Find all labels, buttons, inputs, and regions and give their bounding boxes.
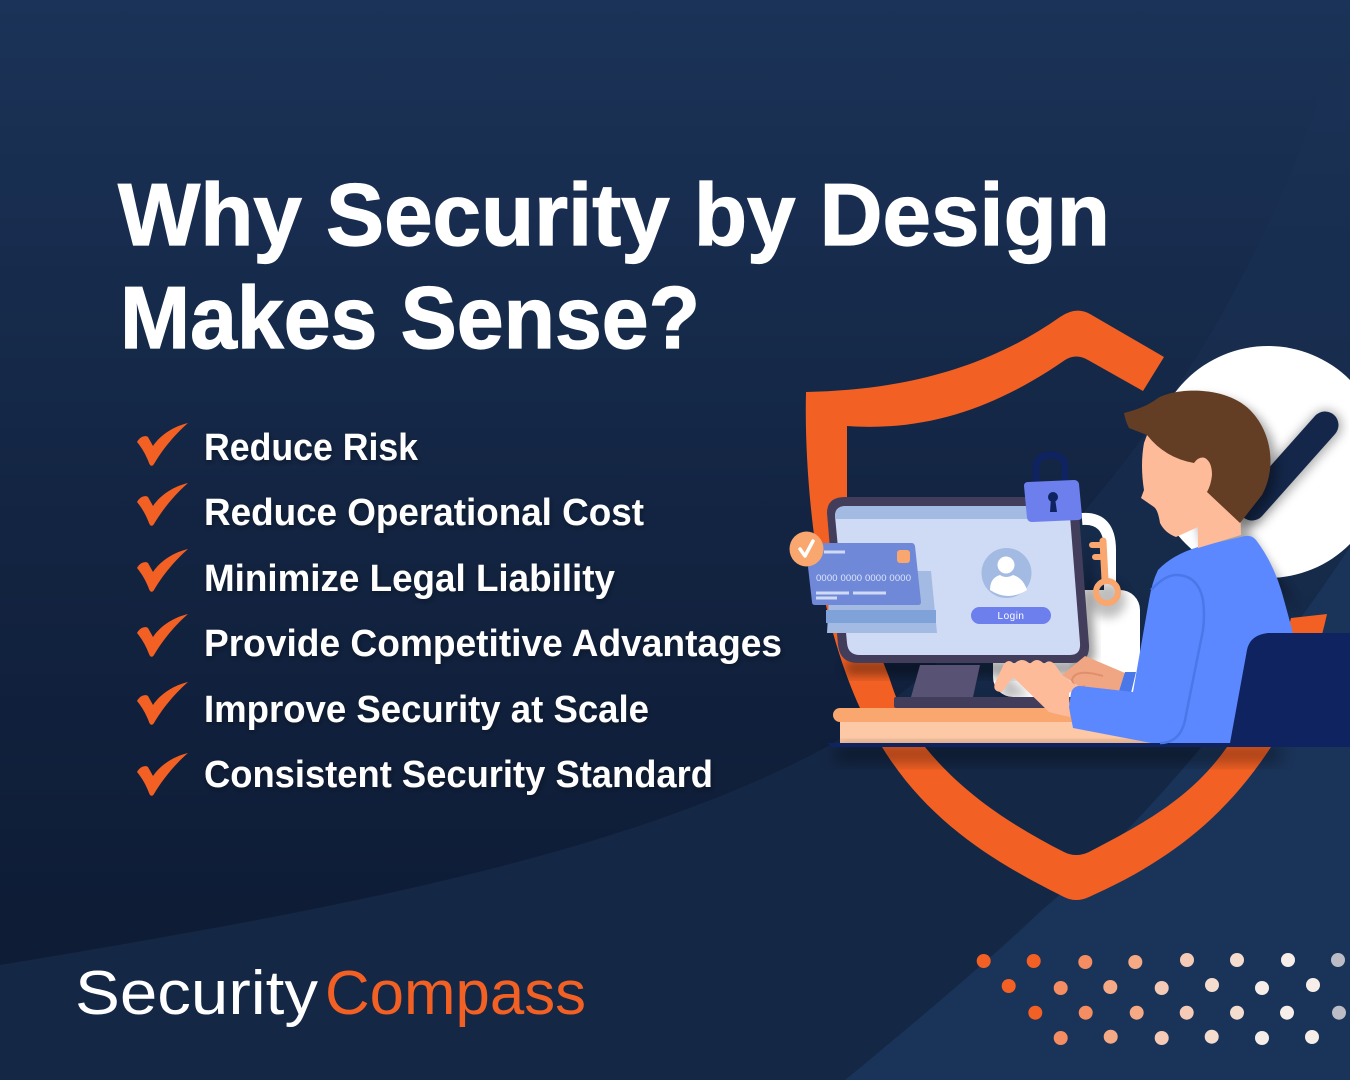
checklist: [137, 423, 782, 796]
item: Minimize Legal Liability: Minimize Legal Liability: [204, 558, 615, 600]
hair: [1124, 391, 1271, 523]
neck and face: [1141, 435, 1241, 548]
icon: lock on monitor: [1024, 455, 1082, 522]
item: Reduce Operational Cost: [137, 483, 644, 534]
login button: [971, 607, 1051, 624]
icon: check badge: [790, 532, 824, 566]
desk: [833, 708, 1155, 743]
monitor shadow: [845, 660, 1085, 676]
cuff: [1119, 672, 1136, 693]
front hand: [994, 660, 1078, 717]
title: Why Security by Design: [118, 165, 1110, 264]
icon: large white padlock: [993, 519, 1140, 700]
icon: white check circle: [1152, 346, 1350, 578]
illustration: security shield and person at computer: [790, 311, 1350, 900]
back hand: [1062, 656, 1125, 691]
logo: Compass: [325, 959, 586, 1028]
icon: shield outline: [806, 311, 1327, 900]
ear: [1194, 458, 1212, 492]
head shadow: [1165, 397, 1297, 606]
torso and arm: [1069, 536, 1293, 743]
icon: key: [1092, 541, 1118, 603]
item: Consistent Security Standard: Consistent Security Standard: [204, 754, 713, 796]
item: Reduce Risk: [137, 423, 419, 469]
floor strip: [827, 743, 1350, 761]
item: Reduce Operational Cost: Reduce Operational Cost: [204, 492, 644, 534]
item: Improve Security at Scale: Improve Security at Scale: [204, 689, 649, 731]
item: Minimize Legal Liability: [137, 549, 615, 600]
title: Makes Sense?: [120, 268, 700, 367]
person: [994, 391, 1350, 743]
icon: monitor: [827, 497, 1089, 708]
icon: user avatar: [982, 548, 1032, 598]
title: [118, 165, 1110, 367]
icon: credit card: [808, 543, 937, 633]
logo: Security: [75, 959, 318, 1028]
login button: Login: [998, 611, 1024, 622]
item: Reduce Risk: Reduce Risk: [204, 427, 419, 469]
decorative dot grid: [977, 953, 1346, 1045]
chair: [1230, 633, 1350, 743]
icon: credit card: 0000 0000 0000 0000: [816, 573, 911, 584]
logo: [75, 959, 586, 1028]
item: Provide Competitive Advantages: Provide Competitive Advantages: [204, 623, 782, 665]
